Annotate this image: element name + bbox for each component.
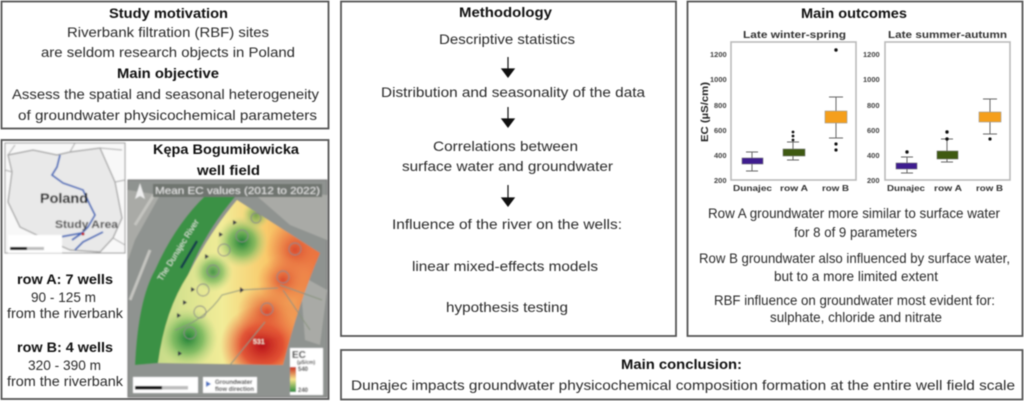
chart: late summer-autumn EC boxplot: 1200 (863, 50, 880, 59)
legend: groundwater flow direction: flow direction (215, 387, 254, 393)
step: correlations: surface water and groundwater (402, 158, 613, 174)
heading: well field: well field (196, 162, 260, 178)
chart: late winter-spring EC boxplot: 800 (714, 101, 727, 110)
chart: late winter-spring EC boxplot: Dunajec (733, 183, 772, 193)
chart: late winter-spring EC boxplot: row A (780, 183, 808, 193)
text: row A outcome: for 8 of 9 parameters (794, 224, 917, 240)
heading: well field (153, 141, 299, 178)
text: row B summary: row B: 4 wells (17, 339, 113, 355)
step: hypothesis testing: hypothesis testing (446, 299, 568, 315)
map label: Poland: Poland (40, 190, 88, 206)
chart: late winter-spring EC boxplot: 1000 (710, 75, 727, 84)
chart: late winter-spring EC boxplot: EC (µS/cm) (700, 82, 711, 142)
text: row A summary: 90 - 125 m (31, 289, 96, 305)
text: motivation statement: are seldom research objects in Poland (41, 44, 295, 60)
panel: methodology (341, 2, 676, 336)
chart: late summer-autumn EC boxplot: 200 (867, 176, 880, 185)
north arrow (135, 183, 145, 199)
step: linear mixed-effects models: linear mixed-effects models (412, 258, 598, 274)
legend: groundwater flow direction (203, 377, 257, 393)
arrow (502, 57, 514, 77)
chart: late summer-autumn EC boxplot: Late summer-autumn (888, 30, 1007, 41)
step: influence of the river: Influence of the river on the wells: (392, 216, 622, 232)
step: correlations: Correlations between (433, 138, 578, 154)
text: motivation statement: Riverbank filtration (RBF) sites (67, 24, 269, 40)
chart: late winter-spring EC boxplot: 200 (714, 176, 727, 185)
chart: late summer-autumn EC boxplot: 1000 (863, 75, 880, 84)
chart: late summer-autumn EC boxplot (863, 30, 1010, 193)
text: RBF influence outcome (714, 292, 995, 325)
heading: study motivation: Study motivation (109, 5, 228, 21)
river Dunajec (135, 196, 235, 365)
text: objective statement (12, 86, 319, 123)
step: distribution and seasonality: Distribution and seasonality of the data (381, 84, 645, 100)
text: row A summary: row A: 7 wells (17, 271, 113, 287)
legend: EC colour scale: 240 (298, 388, 309, 394)
text: motivation statement (41, 24, 295, 60)
chart: late winter-spring EC boxplot: 1200 (710, 50, 727, 59)
text: row B outcome (699, 250, 1010, 284)
chart: late winter-spring EC boxplot: Late winter-spring (743, 30, 846, 41)
wells and flow lines: 531 (253, 339, 265, 346)
river name: The Dunajec River (155, 217, 201, 282)
step: correlations (402, 138, 613, 174)
chart: late summer-autumn EC boxplot: 400 (867, 151, 880, 160)
river flow arrow (181, 241, 197, 268)
heading: well field: Kępa Bogumiłowicka (153, 141, 299, 157)
text: RBF influence outcome: sulphate, chloride and nitrate (770, 309, 942, 325)
arrow (502, 107, 514, 127)
heading: main objective: Main objective (117, 65, 219, 81)
panel: main outcomes (688, 2, 1022, 336)
heading: main conclusion: Main conclusion: (621, 356, 742, 372)
scale bar (133, 377, 198, 393)
panel: main conclusion (341, 350, 1022, 400)
chart: late winter-spring EC boxplot: 400 (714, 151, 727, 160)
map label: study area: Study Area (55, 219, 119, 231)
legend: EC colour scale: 540 (298, 367, 309, 373)
legend: EC colour scale: (µS/cm) (297, 360, 315, 366)
text: row A outcome: Row A groundwater more similar to surface water (708, 205, 1000, 221)
EC heat surface (157, 200, 321, 366)
map scale bar (8, 235, 62, 253)
legend: groundwater flow direction: Groundwater (215, 380, 253, 386)
heading: main outcomes: Main outcomes (801, 5, 907, 21)
chart: late winter-spring EC boxplot (700, 30, 856, 193)
chart: late summer-autumn EC boxplot: row B (976, 183, 1003, 193)
chart: late summer-autumn EC boxplot: 800 (867, 101, 880, 110)
panel: study motivation and objective (2, 2, 328, 128)
text: RBF influence outcome: RBF influence on groundwater most evident for: (714, 292, 995, 308)
step: descriptive statistics: Descriptive statistics (439, 31, 575, 47)
map: Poland locator (5, 143, 125, 253)
text: row A summary: from the riverbank (7, 305, 124, 321)
chart: late summer-autumn EC boxplot: row A (934, 183, 962, 193)
text: row A outcome (708, 205, 1000, 240)
panel: study area and well field (2, 140, 328, 399)
text: row B summary: 320 - 390 m (28, 357, 101, 373)
text: row B outcome: but to a more limited extent (774, 268, 938, 284)
arrow (502, 185, 514, 206)
text: row B outcome: Row B groundwater also influenced by surface water, (699, 250, 1010, 266)
chart: late summer-autumn EC boxplot: Dunajec (887, 183, 925, 193)
text: row B summary: from the riverbank (7, 373, 124, 389)
text: row A summary (7, 271, 124, 321)
map title label: Mean EC values (2012 to 2022) (155, 185, 320, 197)
legend: EC colour scale: EC (292, 350, 306, 361)
wells and flow lines (175, 213, 322, 365)
legend: EC colour scale (290, 348, 323, 395)
text: conclusion statement: Dunajec impacts groundwater physicochemical composition formation at the entire well field scale (351, 377, 1015, 393)
text: objective statement: of groundwater physicochemical parameters (18, 107, 317, 123)
chart: late winter-spring EC boxplot: row B (822, 183, 849, 193)
chart: late summer-autumn EC boxplot: 600 (867, 126, 880, 135)
chart: late winter-spring EC boxplot: 600 (714, 126, 727, 135)
heading: methodology: Methodology (459, 4, 552, 20)
text: objective statement: Assess the spatial and seasonal heterogeneity (12, 86, 319, 102)
text: row B summary (7, 339, 124, 389)
map: mean EC values at well field (128, 180, 327, 397)
